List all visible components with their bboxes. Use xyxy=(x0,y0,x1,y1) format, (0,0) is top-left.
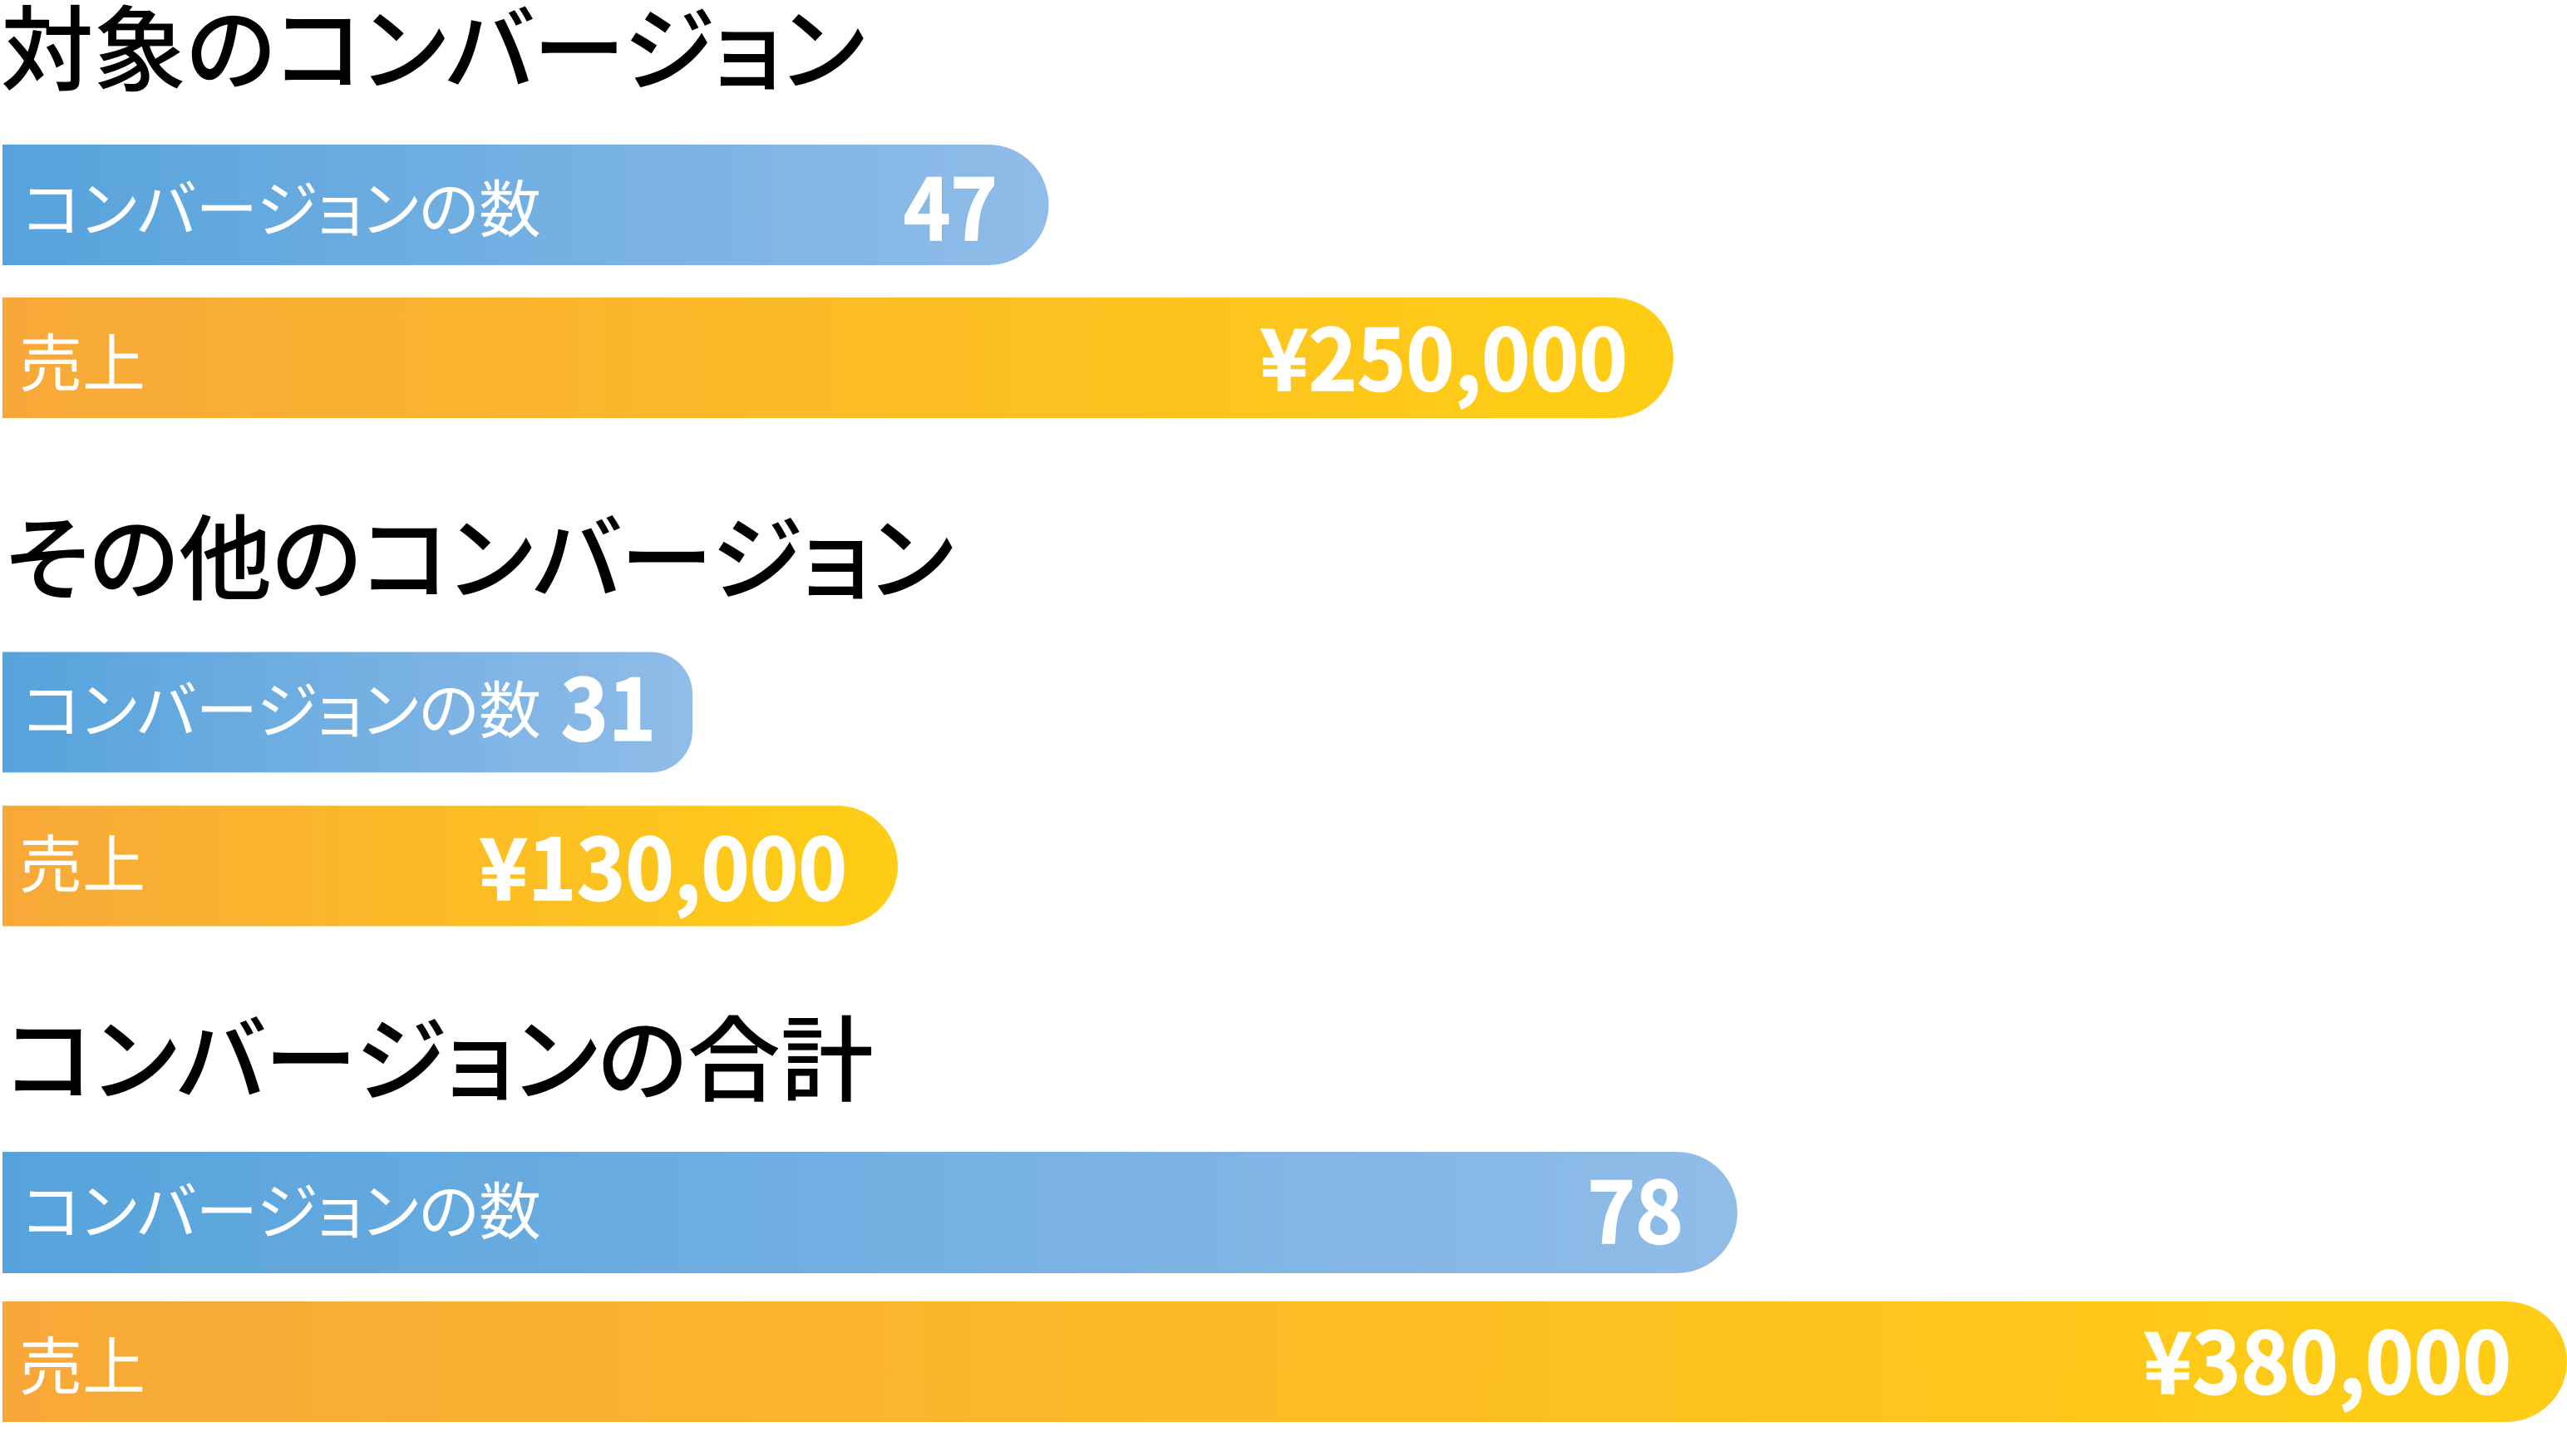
label: conversions: コンバージョンの数 xyxy=(22,1162,541,1252)
bar: total sales xyxy=(2,1295,2567,1422)
value: 130,000 yen: ¥130,000 xyxy=(479,801,847,924)
label: conversions: コンバージョンの数 xyxy=(22,661,541,751)
value: 250,000 yen: ¥250,000 xyxy=(1259,292,1628,415)
bar: target conversions count xyxy=(2,141,1049,265)
value: 31: 31 xyxy=(561,642,656,765)
label: sales: 売上 xyxy=(19,313,145,405)
bar: other sales xyxy=(2,801,898,926)
heading: その他のコンバージョン: その他のコンバージョン xyxy=(5,485,953,620)
value: 380,000 yen: ¥380,000 xyxy=(2143,1295,2511,1418)
value: 78: 78 xyxy=(1587,1145,1683,1268)
label: sales: 売上 xyxy=(19,814,145,906)
heading: コンバージョンの合計: コンバージョンの合計 xyxy=(6,986,874,1121)
bar: other conversions count xyxy=(2,642,692,773)
value: 47: 47 xyxy=(904,141,998,265)
label: conversions: コンバージョンの数 xyxy=(22,160,541,250)
bar: target sales xyxy=(2,292,1673,418)
bar: total conversions count xyxy=(2,1145,1737,1273)
label: sales: 売上 xyxy=(19,1316,145,1408)
